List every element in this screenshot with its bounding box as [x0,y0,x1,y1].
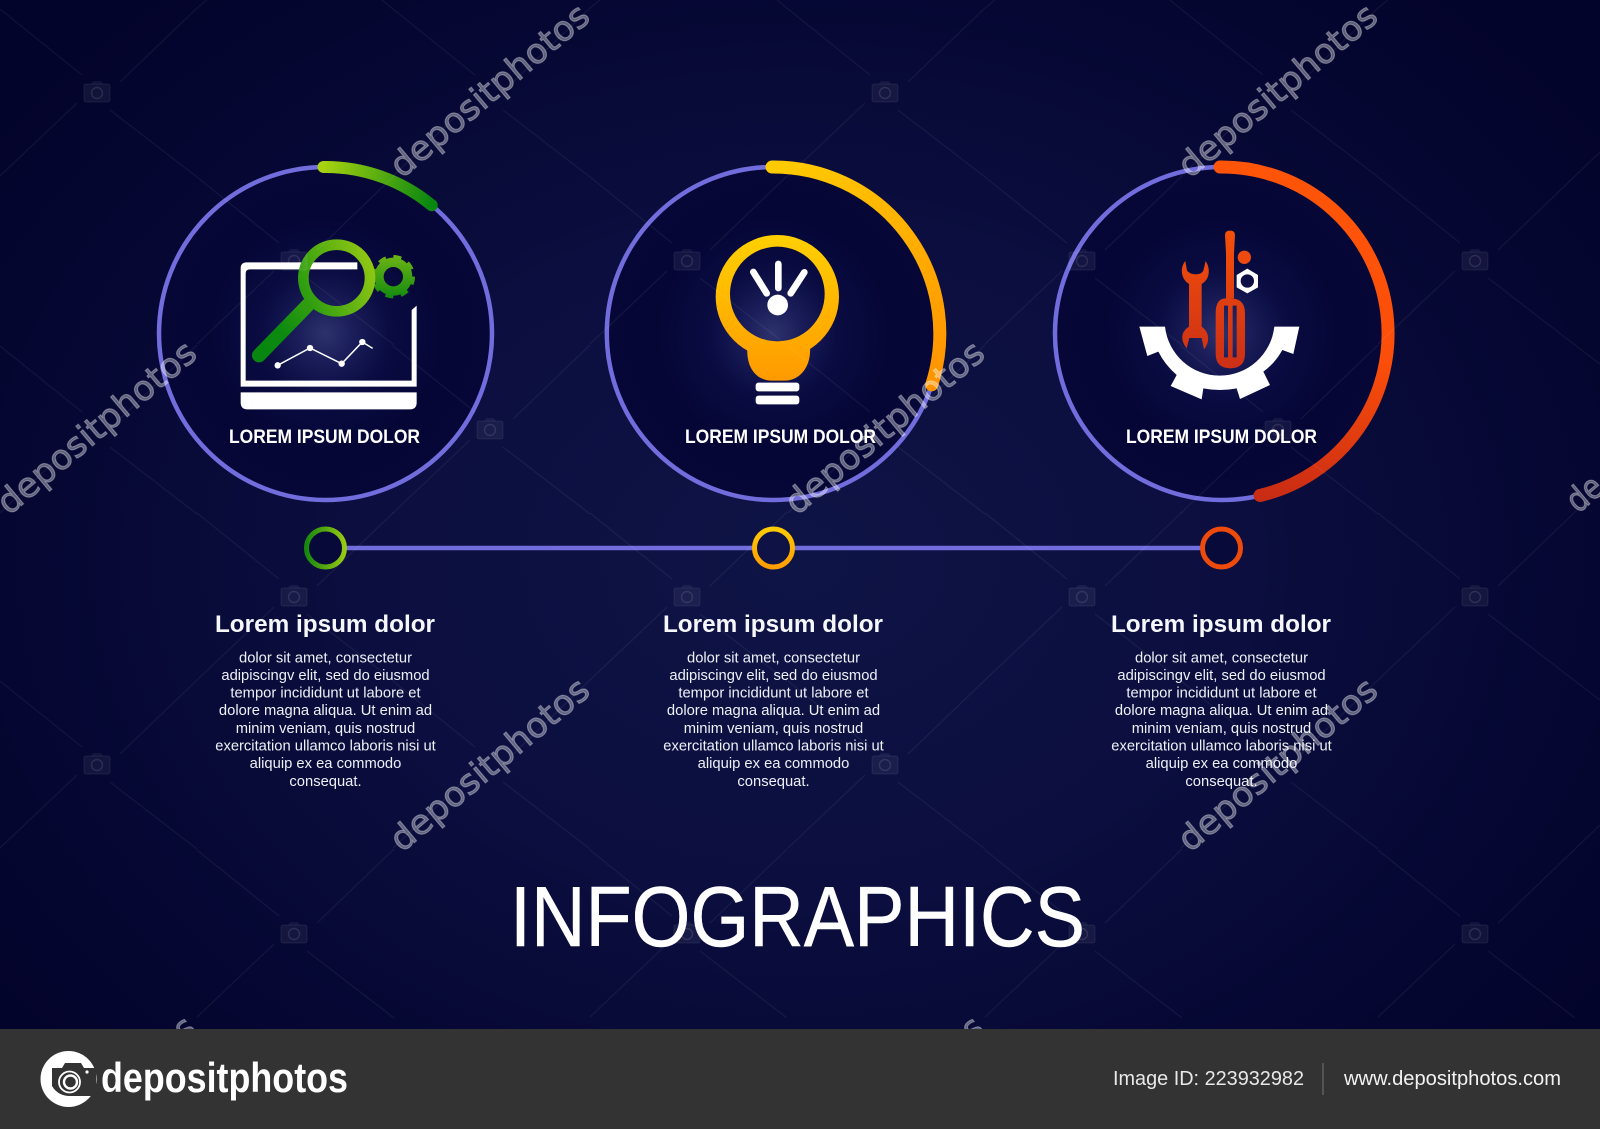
text block: column 1: tempor incididunt ut labore et [230,686,421,702]
text block: column 3: exercitation ullamco laboris nisi ut [1111,739,1332,755]
text block: column 3: adipiscingv elit, sed do eiusmod [1117,668,1326,684]
text block: column 1: adipiscingv elit, sed do eiusmod [221,668,430,684]
watermark pattern: depositphotos [1170,0,1386,186]
progress arc: green [324,167,432,205]
text block: column 3: tempor incididunt ut labore et [1126,686,1317,702]
icon: light bulb [716,235,839,404]
text block: column 3 [1111,611,1332,790]
text block: column 2: adipiscingv elit, sed do eiusmod [669,668,878,684]
text block: column 2: tempor incididunt ut labore et [678,686,869,702]
footer brand name: depositphotos [101,1054,348,1101]
text block: column 3: aliquip ex ea commodo [1146,756,1297,772]
watermark pattern: os [150,1008,204,1062]
watermark pattern: depositphotos [382,0,598,186]
timeline node: green [306,529,344,567]
icon: tools and gear [1139,231,1299,399]
title: INFOGRAPHICS [510,870,1085,965]
text block: column 1: Lorem ipsum dolor [215,611,436,638]
text block: column 1: minim veniam, quis nostrud [236,721,415,737]
text block: column 1: exercitation ullamco laboris nisi ut [215,739,436,755]
text block: column 2: Lorem ipsum dolor [663,611,884,638]
text block: column 3: dolore magna aliqua. Ut enim ad [1115,703,1328,719]
text block: column 2: exercitation ullamco laboris nisi ut [663,739,884,755]
icon: laptop with magnifier and gear [241,245,417,409]
footer url: www.depositphotos.com [1343,1067,1561,1090]
panel: step 2 circle [607,167,940,500]
icon: footer camera logo [40,1051,96,1107]
text block: column 3: minim veniam, quis nostrud [1132,721,1311,737]
text block: column 2: minim veniam, quis nostrud [684,721,863,737]
text block: column 2 [663,611,884,790]
text block: column 2: dolor sit amet, consectetur [687,650,860,666]
panel: step 3 circle [1055,167,1388,500]
watermark pattern: os [938,1008,992,1062]
panel: step 1 circle [159,167,492,500]
text block: column 1: aliquip ex ea commodo [250,756,401,772]
text block: column 1: consequat. [289,774,362,790]
text block: column 3: dolor sit amet, consectetur [1135,650,1308,666]
text block: column 3: Lorem ipsum dolor [1111,611,1332,638]
text block: column 1 [215,611,436,790]
progress arc: orange [772,167,940,385]
circle label: LOREM IPSUM DOLOR [685,426,876,448]
text block: column 3: consequat. [1185,774,1258,790]
text block: column 2: dolore magna aliqua. Ut enim ad [667,703,880,719]
timeline node: red [1202,529,1240,567]
text block: column 1: dolor sit amet, consectetur [239,650,412,666]
text block: column 2: consequat. [737,774,810,790]
text block: column 1: dolore magna aliqua. Ut enim ad [219,703,432,719]
watermark pattern: depositphotos [1170,670,1386,860]
watermark pattern: depositphotos [777,333,993,523]
progress arc: red [1220,167,1388,495]
timeline [306,529,1240,567]
footer bar [0,1029,1600,1129]
footer image id: Image ID: 223932982 [1113,1067,1304,1090]
timeline node: orange [754,529,792,567]
text block: column 2: aliquip ex ea commodo [698,756,849,772]
circle label: LOREM IPSUM DOLOR [229,426,420,448]
circle label: LOREM IPSUM DOLOR [1126,426,1317,448]
watermark pattern: depositphotos [382,670,598,860]
